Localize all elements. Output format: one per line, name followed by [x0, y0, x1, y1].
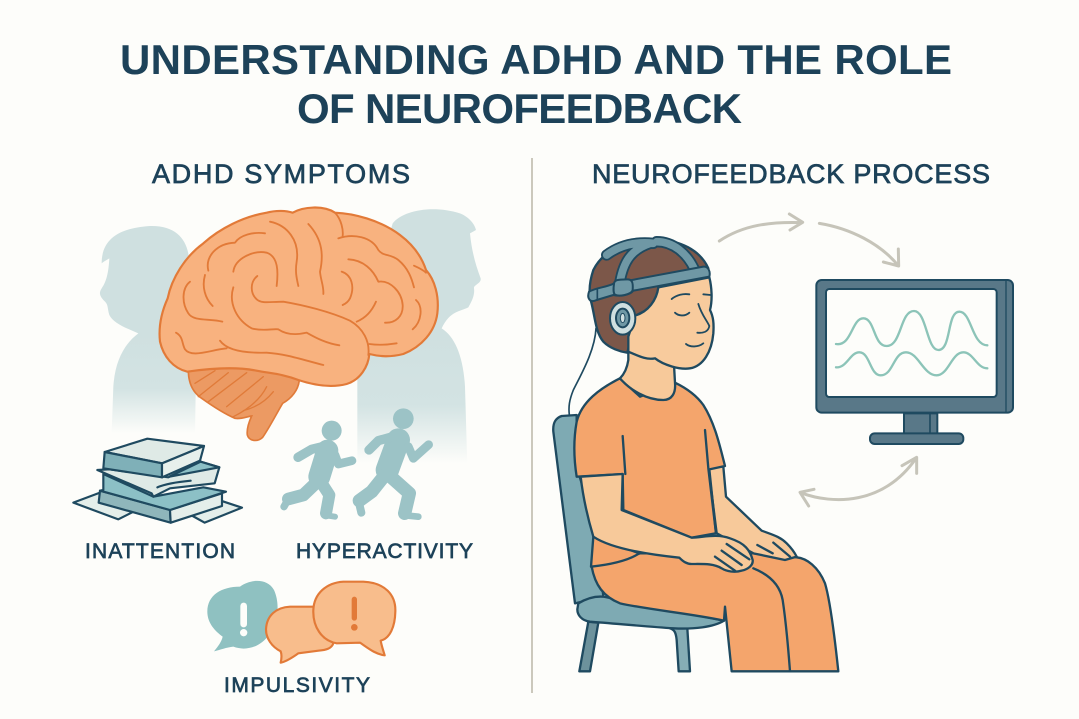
leg divider	[753, 568, 790, 671]
bottom book	[99, 491, 171, 523]
chair legs	[579, 622, 690, 671]
brain waves	[836, 311, 987, 375]
hair	[590, 240, 708, 353]
silhouette: left person	[100, 226, 197, 433]
icon: speech bubbles	[207, 581, 395, 663]
heading: ADHD symptoms: ADHD SYMPTOMS	[152, 159, 410, 189]
headband	[588, 267, 710, 301]
cerebellum hatching	[195, 371, 273, 417]
loose pages	[73, 493, 137, 519]
brain folds	[176, 213, 426, 365]
label: hyperactivity: HYPERACTIVITY	[296, 540, 473, 563]
icon: running figures	[284, 408, 429, 517]
middle book cover	[97, 462, 219, 497]
icon: monitor	[816, 280, 1013, 444]
large orange bubble	[313, 582, 395, 655]
headset straps	[607, 242, 694, 282]
cerebellum and brain stem	[188, 367, 299, 440]
icon: stack of books	[73, 439, 242, 523]
chair back	[553, 415, 603, 603]
ear electrode	[610, 302, 635, 335]
stand neck	[904, 413, 937, 434]
face	[628, 277, 714, 369]
far arm	[708, 467, 797, 560]
shirt and far sleeve	[574, 378, 725, 538]
cable	[569, 328, 596, 415]
screen	[826, 289, 997, 397]
fingers	[715, 543, 790, 571]
label: impulsivity: IMPULSIVITY	[224, 674, 370, 697]
top book	[105, 439, 204, 463]
icon: brain	[160, 208, 438, 440]
illustration: seated person with EEG headset	[553, 240, 838, 671]
arrow: signal to monitor	[819, 223, 899, 266]
chair seat	[577, 597, 724, 629]
frame	[816, 280, 1013, 413]
title: UNDERSTANDING ADHD AND THE ROLE	[120, 36, 952, 83]
stand base	[870, 433, 963, 444]
cerebrum	[160, 208, 438, 386]
label: inattention: INATTENTION	[85, 540, 235, 563]
teal bubble	[207, 581, 278, 651]
small orange bubble	[266, 607, 333, 663]
title: OF NEUROFEEDBACK	[297, 85, 742, 132]
face details	[672, 294, 711, 346]
silhouette: right person	[357, 209, 481, 467]
near arm	[581, 474, 753, 572]
pants	[592, 553, 838, 671]
shirt below the arm	[591, 537, 639, 567]
neck	[620, 333, 675, 400]
title	[120, 36, 952, 132]
arrow: monitor back to person	[800, 457, 917, 506]
third book teal face	[100, 474, 226, 510]
heading: neurofeedback process: NEUROFEEDBACK PROCESS	[592, 159, 990, 189]
inner sleeve lines	[623, 430, 716, 533]
arrow: headset to signal	[719, 214, 803, 241]
